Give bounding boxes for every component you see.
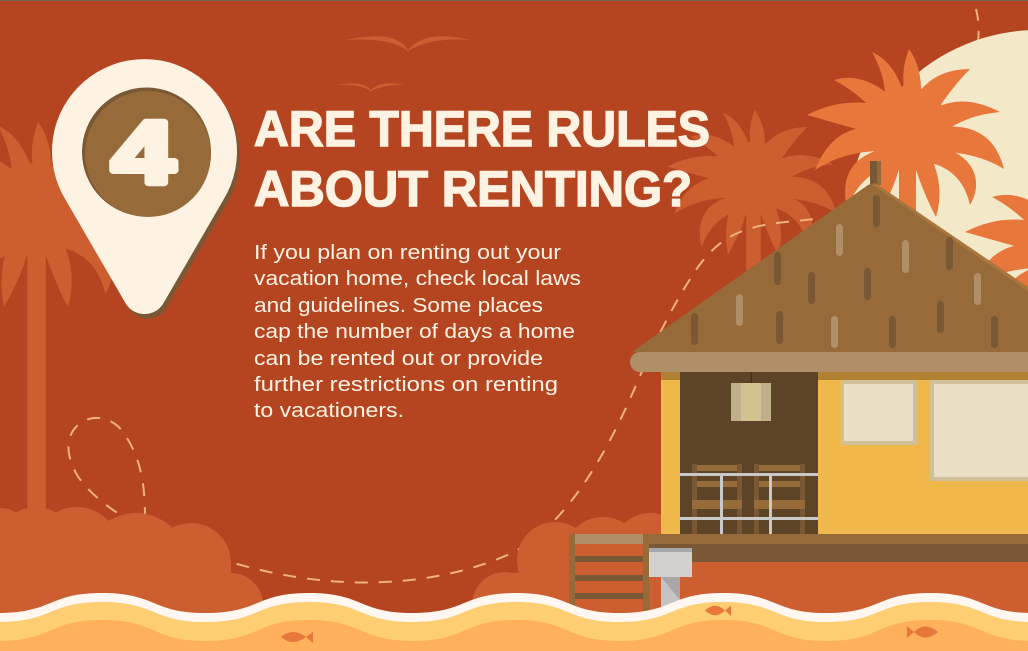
fish: right <box>907 626 938 638</box>
title <box>254 101 710 217</box>
palm tree: large <box>807 49 1004 527</box>
window: left <box>841 380 917 445</box>
porch <box>680 372 818 534</box>
body text: can be rented out or provide <box>254 348 543 370</box>
dashed flight path: upper right <box>976 9 979 42</box>
mailbox <box>649 548 692 617</box>
waves <box>0 593 1028 651</box>
body text: cap the number of days a home <box>254 321 575 343</box>
bushes: right and ground <box>472 513 1028 638</box>
body text: to vacationers. <box>254 400 404 422</box>
deck <box>643 534 1028 562</box>
number 4: 4 <box>112 105 175 202</box>
house <box>569 161 1028 617</box>
chair: left <box>692 464 742 534</box>
body text: and guidelines. Some places <box>254 295 543 317</box>
dashed flight path: loop and swoop <box>68 218 825 582</box>
sun <box>848 30 1028 410</box>
pin body <box>52 59 237 314</box>
body text: vacation home, check local laws <box>254 268 581 290</box>
palm tree: middle <box>667 110 836 521</box>
fish: middle <box>705 606 731 616</box>
hanging lamp <box>731 372 771 421</box>
ladder <box>569 534 649 614</box>
body text: If you plan on renting out your <box>254 242 561 264</box>
chimney <box>870 161 881 185</box>
palm tree: left <box>0 122 143 648</box>
palm tree: right <box>965 166 1028 644</box>
body text: further restrictions on renting <box>254 374 558 396</box>
title: ABOUT RENTING? <box>254 161 692 217</box>
bushes: left <box>0 507 263 637</box>
house wall <box>661 372 1028 534</box>
title: ARE THERE RULES <box>254 101 710 157</box>
roof eave <box>630 352 1028 372</box>
birds <box>338 36 470 91</box>
fish: left <box>281 632 313 643</box>
porch railing <box>680 473 818 534</box>
location pin <box>52 59 240 319</box>
pin shadow <box>55 64 240 319</box>
body text <box>254 242 581 422</box>
pin circle <box>82 88 211 216</box>
roof thatch marks <box>691 195 998 348</box>
window: right <box>930 380 1028 481</box>
chair: right <box>754 464 805 534</box>
roof <box>630 161 1028 372</box>
